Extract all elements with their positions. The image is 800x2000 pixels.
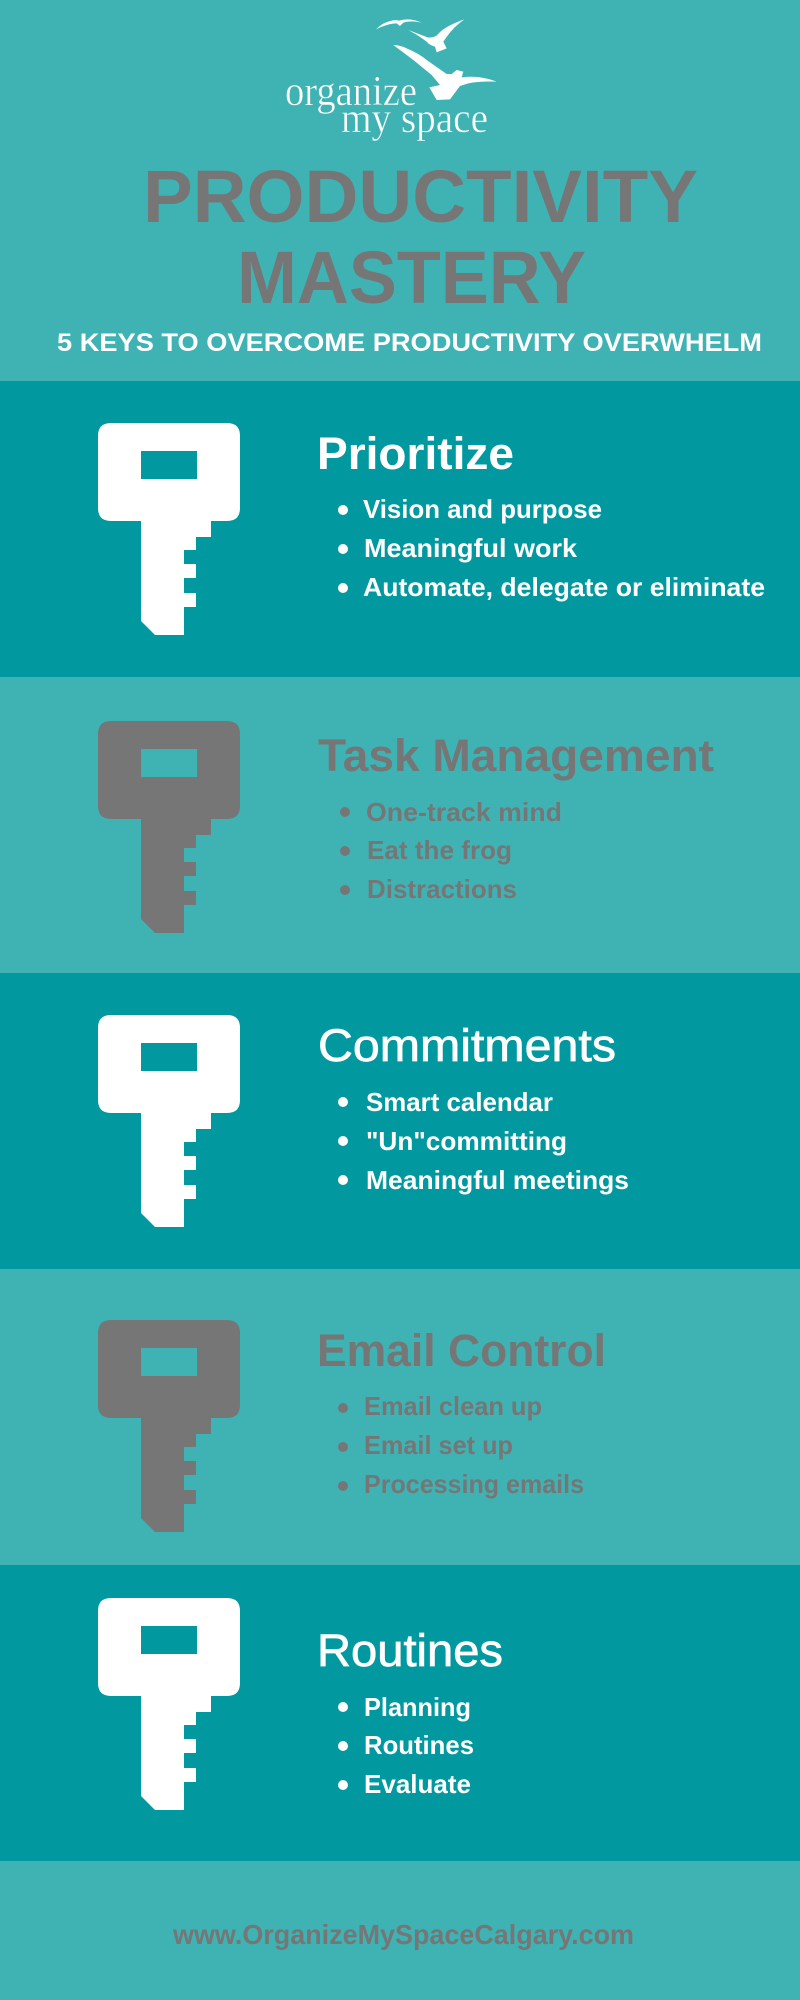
panel: commitments [0, 973, 800, 1269]
list: email control items: Email set up [364, 1430, 513, 1460]
panel: routines [0, 1565, 800, 1861]
list: email control items [338, 1391, 584, 1499]
logo [285, 19, 497, 142]
title: MASTERY [237, 236, 586, 319]
list: prioritize items: Vision and purpose [363, 494, 602, 524]
subtitle: 5 KEYS TO OVERCOME PRODUCTIVITY OVERWHELM [57, 329, 762, 357]
list: routines items [338, 1692, 474, 1799]
logo text: my space [341, 96, 488, 142]
icon: grey key [98, 1320, 240, 1532]
icon: white key [98, 1015, 240, 1227]
list: routines items: Planning [364, 1692, 471, 1722]
list: email control items: Email clean up [364, 1391, 542, 1421]
list: commitments items [338, 1087, 629, 1195]
heading: email control: Email Control [317, 1325, 606, 1376]
heading: commitments: Commitments [318, 1020, 616, 1071]
icon: white key [98, 1598, 240, 1810]
list: task management items [340, 797, 562, 904]
heading: task management: Task Management [318, 730, 714, 781]
heading: routines: Routines [317, 1625, 503, 1676]
heading: prioritize: Prioritize [317, 428, 514, 479]
list: commitments items: "Un"committing [366, 1126, 567, 1156]
title [143, 155, 698, 319]
list: prioritize items: Automate, delegate or eliminate [363, 572, 765, 602]
list: commitments items: Smart calendar [366, 1087, 553, 1117]
list: prioritize items: Meaningful work [364, 533, 578, 563]
panel: email control [98, 1320, 606, 1532]
logo text: organize [285, 69, 417, 115]
list: task management items: One-track mind [366, 797, 562, 827]
list: routines items: Routines [364, 1730, 474, 1760]
list: prioritize items [338, 494, 765, 602]
panel: task management [98, 721, 714, 933]
panel: prioritize [0, 381, 800, 677]
list: commitments items: Meaningful meetings [366, 1165, 629, 1195]
icon: seagulls [376, 19, 497, 100]
list: task management items: Eat the frog [367, 835, 512, 865]
logo text [285, 69, 488, 142]
icon: white key [98, 423, 240, 635]
list: task management items: Distractions [367, 874, 517, 904]
title: PRODUCTIVITY [143, 155, 698, 238]
list: routines items: Evaluate [364, 1769, 471, 1799]
footer url: www.OrganizeMySpaceCalgary.com [172, 1919, 634, 1950]
list: email control items: Processing emails [364, 1469, 584, 1499]
icon: grey key [98, 721, 240, 933]
